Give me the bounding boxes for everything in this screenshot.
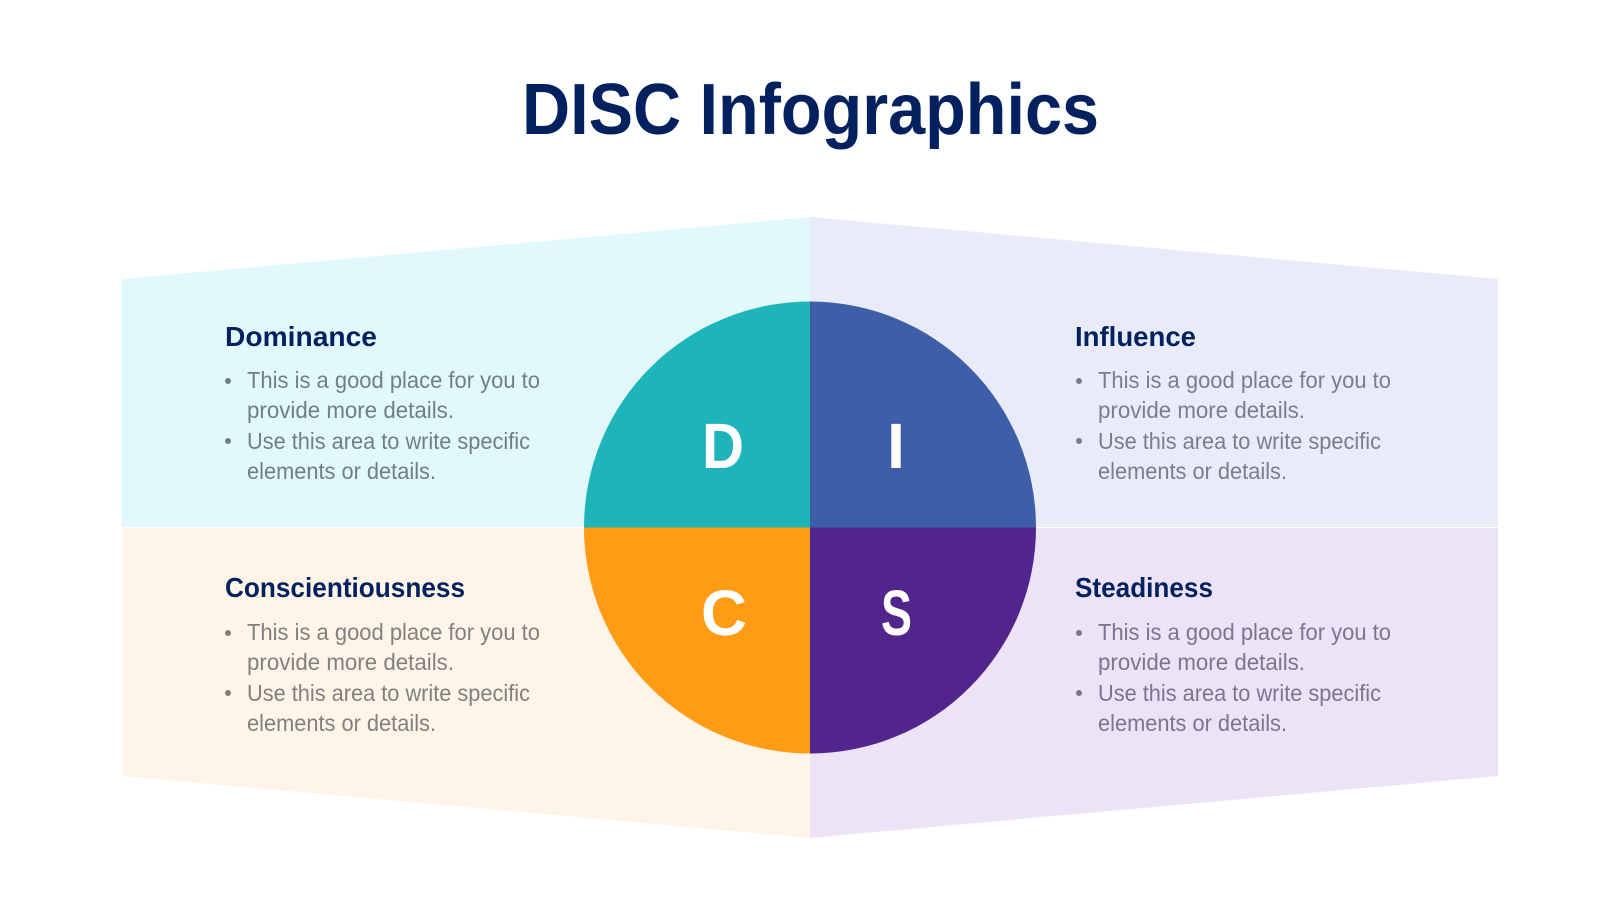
heading: Dominance (225, 321, 377, 352)
letter D: D (702, 410, 744, 482)
bullet list (1076, 367, 1391, 484)
bullet list: elements or details. (1098, 458, 1287, 484)
letter S: S (881, 577, 912, 649)
bullet list: Use this area to write specific (247, 680, 530, 706)
letter I: I (887, 410, 905, 482)
bullet list: This is a good place for you to (1098, 367, 1391, 393)
text block: Influence (1075, 321, 1391, 484)
bullet list: This is a good place for you to (1098, 619, 1391, 645)
bullet list: This is a good place for you to (247, 619, 540, 645)
heading: Influence (1075, 321, 1196, 352)
bullet list: Use this area to write specific (1098, 428, 1381, 454)
text block: Steadiness (1075, 572, 1391, 736)
quadrant: D (584, 302, 810, 528)
bullet list: provide more details. (1098, 397, 1305, 423)
panel: dominance background (122, 217, 810, 527)
chart: DISC circle (584, 302, 1036, 754)
bullet list (1076, 619, 1391, 736)
bullet list: Use this area to write specific (1098, 680, 1381, 706)
bullet list: This is a good place for you to (247, 367, 540, 393)
quadrant: S (810, 528, 1036, 754)
bullet list: elements or details. (1098, 710, 1287, 736)
bullet list: Use this area to write specific (247, 428, 530, 454)
heading: Conscientiousness (225, 572, 465, 603)
bullet list (225, 367, 540, 484)
letter C: C (701, 577, 747, 649)
heading: Steadiness (1075, 572, 1213, 603)
bullet list: elements or details. (247, 458, 436, 484)
bullet list: provide more details. (247, 397, 454, 423)
bullet list: elements or details. (247, 710, 436, 736)
panel: influence background (810, 217, 1498, 527)
quadrant: C (584, 528, 810, 754)
text block: Dominance (225, 321, 540, 484)
text block: Conscientiousness (225, 572, 540, 736)
title: DISC Infographics (522, 70, 1099, 150)
panel: steadiness background (810, 528, 1498, 838)
bullet list: provide more details. (1098, 649, 1305, 675)
quadrant: I (810, 302, 1036, 528)
bullet list (225, 619, 540, 736)
panel: conscientiousness background (122, 528, 810, 838)
bullet list: provide more details. (247, 649, 454, 675)
